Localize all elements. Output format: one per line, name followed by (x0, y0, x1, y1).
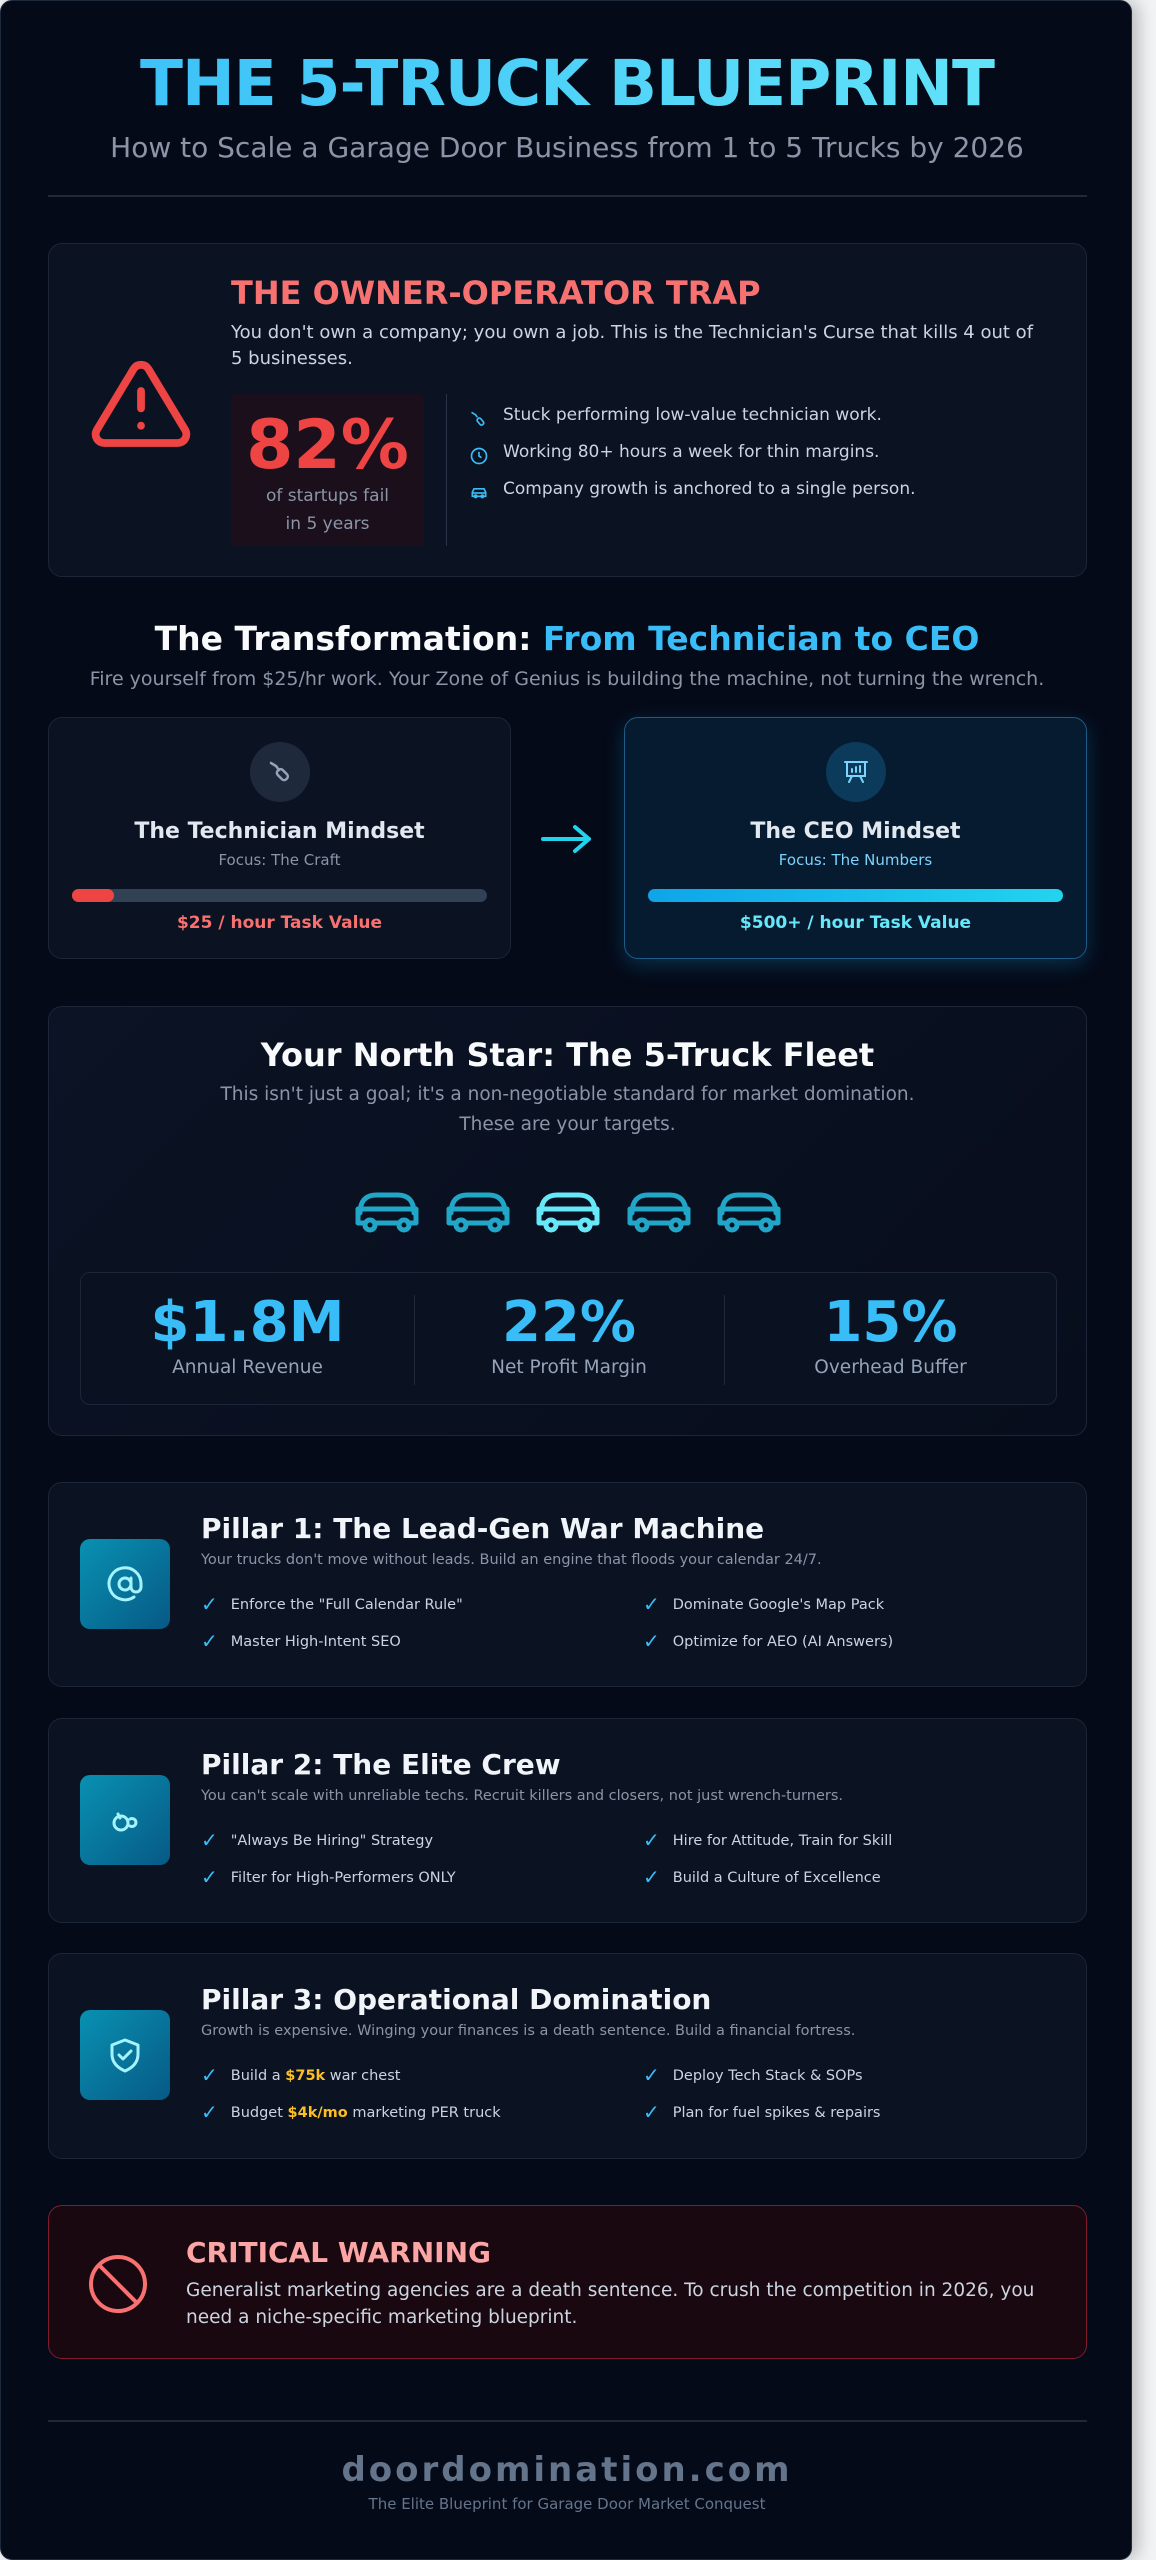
panel: critical warning (48, 2205, 1087, 2359)
panel: ceo mindset: The CEO Mindset (750, 819, 961, 844)
icon: screwdriver (250, 742, 310, 802)
panel: ceo mindset: Focus: The Numbers (779, 851, 932, 869)
icon: wrench (471, 412, 485, 426)
icon: car (472, 488, 486, 498)
panel: pillar 1: ✓ Optimize for AEO (AI Answers) (643, 1629, 893, 1653)
stat: margin (491, 1290, 647, 1378)
stats row (80, 1272, 1057, 1405)
heading: THE OWNER-OPERATOR TRAP (231, 274, 761, 312)
checklist: ✓ Enforce the "Full Calendar Rule" (201, 1592, 463, 1616)
panel: pillar 3: ✓ Deploy Tech Stack & SOPs (643, 2063, 863, 2087)
icons: five trucks (356, 1192, 780, 1232)
panel: pillar 2: ✓ Hire for Attitude, Train for Skill (643, 1828, 892, 1852)
bullet list: Working 80+ hours a week for thin margins. (503, 442, 879, 462)
panel: pillar 1: Your trucks don't move without leads. Build an engine that floods your calendar 24/7. (201, 1552, 822, 1568)
subtitle: These are your targets. (459, 1114, 676, 1135)
checklist: ✓ "Always Be Hiring" Strategy (201, 1828, 433, 1852)
panel: ceo mindset (624, 717, 1087, 959)
panel: pillar 1: ✓ Master High-Intent SEO (201, 1629, 401, 1653)
icon: warning triangle (92, 360, 190, 447)
panel: technician mindset (48, 717, 511, 959)
stat: revenue: Annual Revenue (172, 1357, 323, 1378)
bar: technician value (72, 889, 487, 902)
stat: overhead: Overhead Buffer (814, 1357, 967, 1378)
panel: pillar 1: ✓ Dominate Google's Map Pack (643, 1592, 884, 1616)
text: Generalist marketing agencies are a death sentence. To crush the competition in 2026, you need a niche-specific marketing blueprint. (186, 2280, 1034, 2328)
title: Pillar 2: The Elite Crew (201, 1748, 561, 1781)
title: Pillar 1: The Lead-Gen War Machine (201, 1512, 764, 1545)
subtitle: This isn't just a goal; it's a non-negotiable standard for market domination. (220, 1084, 914, 1105)
stat: 82%: in 5 years (286, 514, 369, 534)
heading: Your North Star: The 5-Truck Fleet (261, 1036, 874, 1074)
checklist: ✓ Build a $75k war chest (201, 2063, 400, 2087)
bar: ceo value (648, 889, 1063, 902)
panel: owner-operator trap (48, 243, 1087, 577)
subtitle: How to Scale a Garage Door Business from 1 to 5 Trucks by 2026 (110, 131, 1024, 164)
heading: transformation: The Transformation: From Technician to CEO (155, 619, 979, 658)
bullet list: Stuck performing low-value technician work. (503, 405, 882, 425)
subtitle (220, 1084, 914, 1135)
panel: pillar 3: ✓ Plan for fuel spikes & repairs (643, 2100, 880, 2124)
panel: pillar 2: You can't scale with unreliable techs. Recruit killers and closers, not just wrench-turners. (201, 1788, 843, 1804)
icon: clock (470, 448, 488, 464)
heading: CRITICAL WARNING (186, 2236, 491, 2269)
stat: 82%: of startups fail (266, 486, 389, 506)
title: Pillar 3: Operational Domination (201, 1983, 711, 2016)
panel: pillar 3: Growth is expensive. Winging your finances is a death sentence. Build a financial fortress. (201, 2023, 855, 2039)
stat: margin: 22% (502, 1290, 636, 1355)
bullet list: Company growth is anchored to a single person. (503, 479, 916, 499)
text block: You don't own a company; you own a job. This is the Technician's Curse that kills 4 out of 5 businesses. (231, 322, 1033, 369)
footer tagline: The Elite Blueprint for Garage Door Market Conquest (369, 2495, 765, 2513)
panel: pillar 1 (48, 1482, 1087, 1687)
icon: presentation chart (826, 742, 886, 802)
panel: pillar 2: ✓ Build a Culture of Excellence (643, 1865, 881, 1889)
panel: ceo mindset: $500+ / hour Task Value (740, 913, 971, 933)
panel: pillar 2 (48, 1718, 1087, 1923)
stat: overhead (814, 1290, 967, 1378)
panel: pillar 3: ✓ Budget $4k/mo marketing PER truck (201, 2100, 501, 2124)
footer domain: doordomination.com (341, 2450, 793, 2490)
icon: crew (80, 1775, 170, 1865)
panel: technician mindset: $25 / hour Task Value (177, 913, 382, 933)
panel: technician mindset: The Technician Mindset (134, 819, 425, 844)
icon: shield check (80, 2010, 170, 2100)
title (1, 44, 1133, 124)
stat: 82%: 82% (246, 406, 409, 485)
title: THE 5-TRUCK BLUEPRINT (140, 47, 994, 120)
panel: pillar 3 (48, 1953, 1087, 2159)
bullet list (470, 405, 916, 499)
icon: at sign (80, 1539, 170, 1629)
stat: 82% (231, 394, 424, 546)
icon: prohibited (89, 2255, 147, 2313)
stat: overhead: 15% (823, 1290, 958, 1355)
arrow (541, 824, 592, 854)
stat: margin: Net Profit Margin (491, 1357, 647, 1378)
panel: north star (48, 1006, 1087, 1436)
panel: technician mindset: Focus: The Craft (218, 851, 341, 869)
panel: pillar 2: ✓ Filter for High-Performers ONLY (201, 1865, 456, 1889)
stat: revenue: $1.8M (151, 1290, 344, 1355)
subtitle: transformation: Fire yourself from $25/hr work. Your Zone of Genius is building the machine, not turning the wrench. (90, 668, 1044, 690)
